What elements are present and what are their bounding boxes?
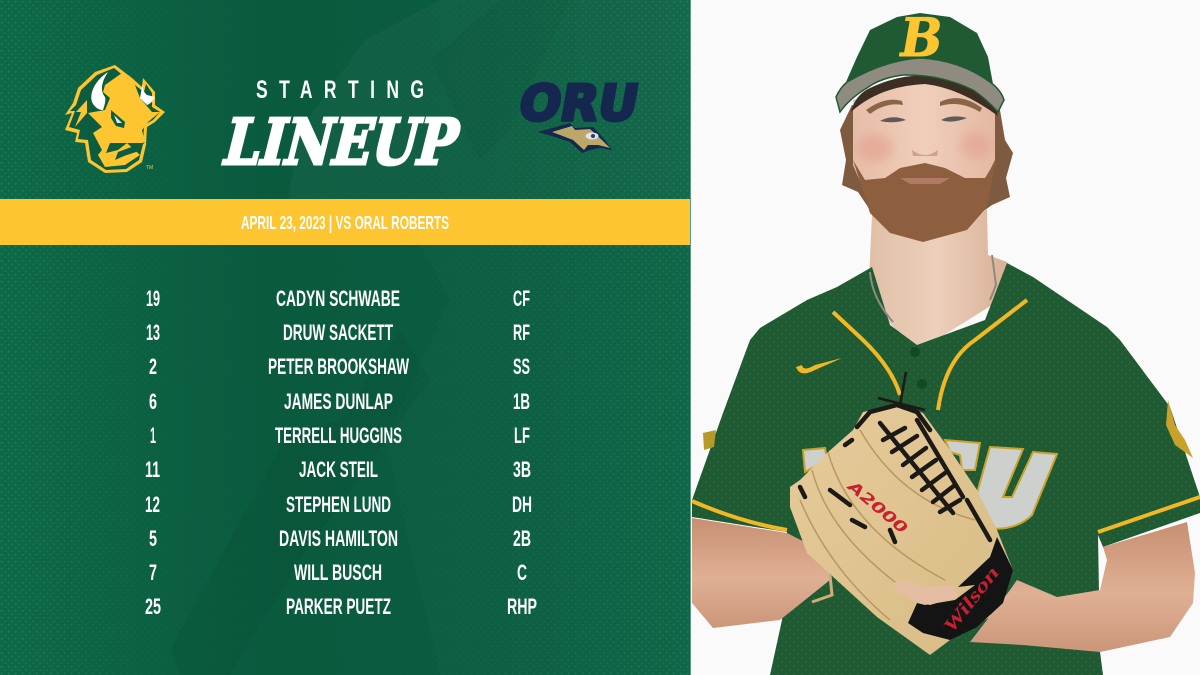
- beard: [853, 160, 996, 242]
- row 2: DRUW SACKETT: [283, 320, 393, 345]
- row 10: PARKER PUETZ: [286, 594, 391, 619]
- jersey lettering: [803, 440, 1057, 529]
- cheeks: [857, 131, 990, 162]
- buttons: [910, 347, 927, 389]
- heading: STARTING: STARTING: [256, 75, 424, 104]
- heading: LINEUP: LINEUP: [216, 106, 466, 180]
- glove wrist strap: [908, 537, 1013, 640]
- glove webbing laces: [800, 405, 990, 542]
- row 5: LF: [514, 423, 530, 448]
- row 6: 11: [145, 457, 160, 482]
- row 1: CF: [513, 286, 530, 311]
- hand: [893, 581, 957, 605]
- row 3: 2: [149, 354, 157, 379]
- row 7: [145, 492, 532, 517]
- row 2: 13: [146, 320, 160, 345]
- logo: NDSU bison: [65, 65, 165, 173]
- panel: green lineup background: [0, 0, 690, 675]
- jersey trim: [692, 300, 1200, 532]
- row 3: SS: [513, 354, 530, 379]
- row 1: [146, 286, 530, 311]
- row 9: C: [517, 560, 527, 585]
- sleeve logo: [1166, 400, 1193, 458]
- cap B: B: [895, 6, 948, 69]
- neck: [868, 210, 1007, 352]
- row 6: JACK STEIL: [299, 457, 378, 482]
- date banner: [0, 199, 690, 245]
- row 6: [145, 457, 531, 482]
- date banner: APRIL 23, 2023 | VS ORAL ROBERTS: [241, 213, 449, 233]
- row 5: TERRELL HUGGINS: [275, 423, 402, 448]
- logo: NDSU bison: TM: [146, 165, 153, 171]
- face: [853, 80, 995, 225]
- row 9: [149, 560, 527, 585]
- row 1: 19: [146, 286, 160, 311]
- row 5: 1: [150, 423, 156, 448]
- row 4: [149, 389, 530, 414]
- hair: [840, 105, 1013, 210]
- row 3: PETER BROOKSHAW: [268, 354, 409, 379]
- row 2: RF: [513, 320, 530, 345]
- necklace: [870, 255, 996, 322]
- row 10: 25: [145, 594, 161, 619]
- row 5: [150, 423, 530, 448]
- photo panel: pitcher: [690, 0, 1200, 675]
- row 7: 12: [145, 492, 160, 517]
- row 4: 1B: [513, 389, 530, 414]
- row 7: DH: [512, 492, 532, 517]
- row 8: DAVIS HAMILTON: [279, 526, 398, 551]
- features: [866, 98, 982, 184]
- row 4: JAMES DUNLAP: [284, 389, 393, 414]
- row 3: [149, 354, 530, 379]
- row 10: [145, 594, 537, 619]
- sleeve patch: [703, 430, 716, 450]
- strap Wilson logo: Wilson: [939, 563, 1004, 637]
- glove seams: [800, 430, 975, 620]
- row 8: 2B: [513, 526, 531, 551]
- lineup table: [145, 286, 537, 619]
- row 8: [149, 526, 531, 551]
- jersey: [692, 263, 1200, 675]
- row 4: 6: [149, 389, 157, 414]
- cap: [836, 6, 1004, 116]
- logo: ORU golden eagles: ORU: [515, 74, 643, 132]
- row 1: CADYN SCHWABE: [276, 286, 400, 311]
- swoosh: [796, 358, 842, 373]
- glove A2000 stamp: A2000: [843, 476, 911, 537]
- row 2: [146, 320, 530, 345]
- left arm: [692, 518, 830, 628]
- row 8: 5: [149, 526, 157, 551]
- panel edge: [690, 0, 691, 675]
- glove: [790, 372, 1013, 655]
- row 9: 7: [149, 560, 157, 585]
- row 7: STEPHEN LUND: [286, 492, 391, 517]
- row 6: 3B: [513, 457, 531, 482]
- row 10: RHP: [507, 594, 537, 619]
- right arm: [970, 522, 1195, 652]
- row 9: WILL BUSCH: [294, 560, 382, 585]
